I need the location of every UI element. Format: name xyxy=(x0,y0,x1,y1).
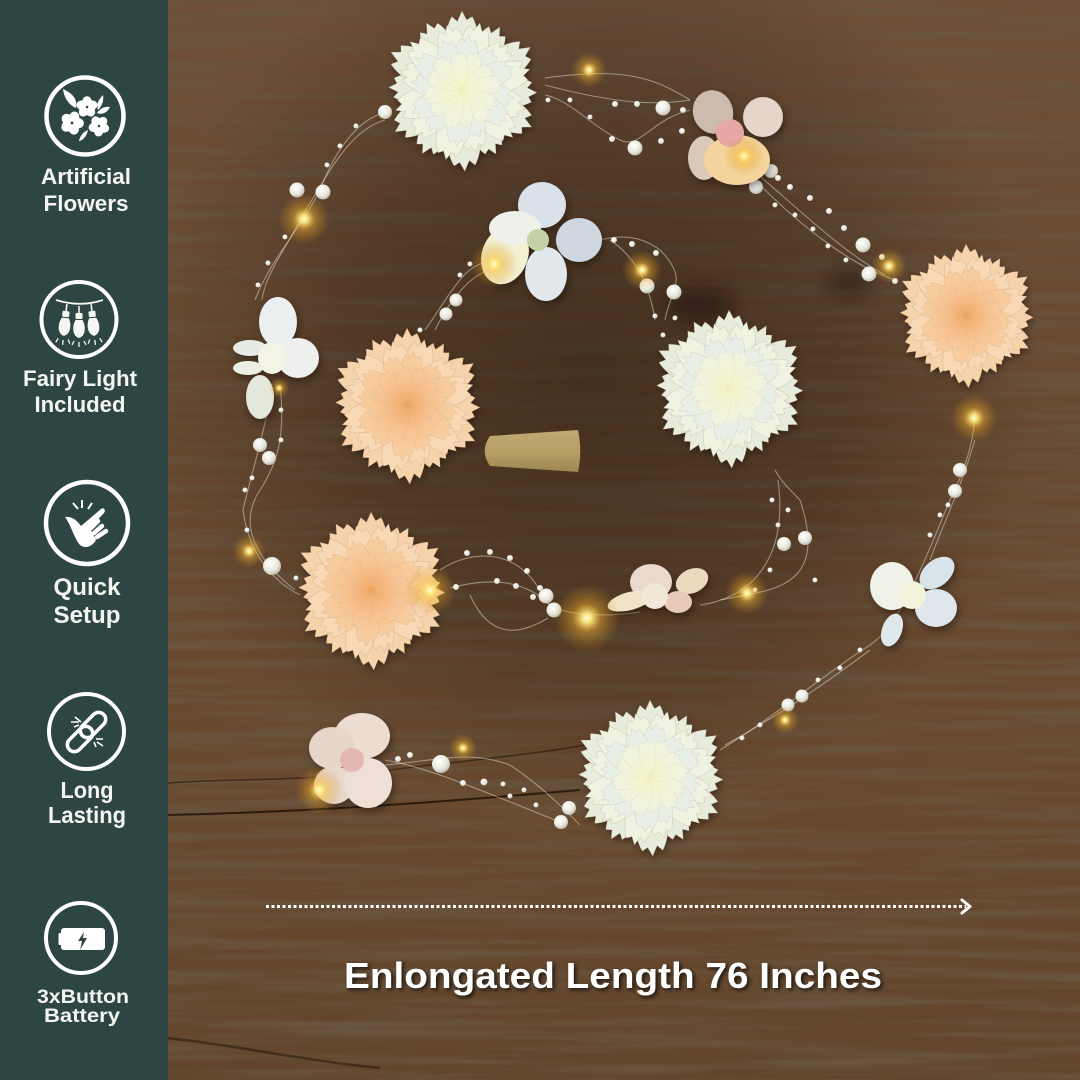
label: Fairy Light Included: Fairy Light xyxy=(23,366,138,391)
label: 3xButton Battery: 3xButton xyxy=(37,987,129,1008)
feature: battery: Battery xyxy=(44,1006,120,1027)
icon: flowers xyxy=(46,78,124,154)
feature: artificial flowers: Flowers xyxy=(44,191,128,216)
label: Quick Setup: Quick xyxy=(54,574,121,601)
icon: string of lights xyxy=(42,282,116,357)
cork stopper xyxy=(485,430,580,472)
feature: quick setup xyxy=(46,482,128,629)
icon: battery xyxy=(46,903,116,973)
peach dahlia: lower left xyxy=(286,506,454,676)
pearls xyxy=(242,98,967,829)
icon: finger snap hand xyxy=(46,482,128,564)
wire strands xyxy=(243,74,975,825)
feature: fairy light xyxy=(23,282,138,417)
feature: quick setup: Setup xyxy=(54,602,120,629)
feature: artificial flowers xyxy=(41,78,131,216)
caption: enlongated length: Enlongated Length 76 Inches xyxy=(344,955,882,996)
feature: long lasting: Lasting xyxy=(48,802,126,828)
small flower: white left xyxy=(233,297,319,419)
white dahlia: centre right xyxy=(644,304,812,474)
small flower: white centre top xyxy=(473,182,602,301)
feature: fairy light: Included xyxy=(34,392,126,417)
feature: battery xyxy=(37,903,129,1027)
small flower: centre pink xyxy=(605,563,712,616)
peach dahlia: right xyxy=(889,238,1041,393)
white dahlia: top xyxy=(376,5,546,177)
white dahlia: bottom xyxy=(566,694,732,862)
small flower: white right xyxy=(870,550,961,649)
label: Artificial Flowers: Artificial xyxy=(41,164,131,189)
icon: chain link xyxy=(49,694,124,769)
fairy light glows xyxy=(232,52,998,814)
small flower: bottom left pink xyxy=(309,713,392,808)
small flower: top right pink xyxy=(687,84,783,185)
feature: long lasting xyxy=(48,694,126,828)
peach dahlia: centre left xyxy=(323,322,489,490)
arrow: dotted length indicator xyxy=(266,900,970,913)
sidebar panel xyxy=(0,0,168,1080)
label: Long Lasting: Long xyxy=(60,777,114,803)
